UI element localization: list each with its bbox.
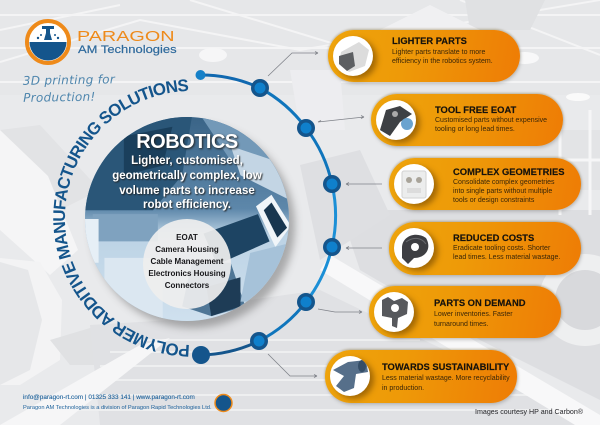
logo: Paragon AM Technologies [25, 19, 177, 65]
inner circle: applications list [143, 219, 231, 309]
icon: blue-grey duct part [330, 356, 370, 396]
logo wordmark: PARAGON [77, 29, 175, 45]
panel: parts on demand: PARTS ON DEMAND [434, 297, 526, 308]
panel: reduced costs [389, 222, 581, 275]
footer contact details: info@paragon-rt.com | 01325 333 141 | www.paragon-rt.com [23, 394, 195, 401]
panel: towards sustainability [325, 350, 517, 403]
panel: complex geometries: tools or design constraints [453, 197, 534, 204]
logo mark [25, 19, 71, 65]
inner circle: applications list: Camera Housing [155, 245, 219, 254]
icon: white manifold part [394, 164, 434, 204]
footer division note: Paragon AM Technologies is a division of Paragon Rapid Technologies Ltd. [23, 405, 212, 411]
central circle: robotics photo [85, 117, 289, 321]
panel: towards sustainability: in production. [382, 385, 424, 392]
curved title: Polymer Additive Manufacturing Solutions: POLYMER ADDITIVE MANUFACTURING SOLUTIONS [53, 79, 189, 357]
panel: reduced costs: REDUCED COSTS [453, 232, 534, 243]
image credit: Images courtesy HP and Carbon® [475, 408, 583, 416]
panel: lighter parts: efficiency in the robotics system. [392, 58, 493, 65]
panel: towards sustainability: Less material wastage. More recyclability [382, 375, 510, 382]
tagline: 3D printing for Production [22, 72, 116, 105]
panel: tool free EOAT: tooling or long lead times. [435, 126, 515, 133]
panel: reduced costs: lead times. Less material wastage. [453, 254, 560, 261]
panel: lighter parts [328, 30, 520, 82]
tagline: 3D printing for Production: 3D printing for [23, 72, 115, 88]
icon: robot gripper part [333, 36, 373, 76]
central description: robot efficiency. [143, 199, 231, 211]
panel: lighter parts: Lighter parts translate to more [392, 49, 485, 56]
panel: tool free EOAT: TOOL FREE EOAT [435, 104, 516, 115]
end node [192, 346, 210, 364]
inner circle: applications list: Cable Management [151, 257, 223, 266]
panel: tool free EOAT: Customised parts without expensive [435, 117, 547, 124]
panel: parts on demand: Lower inventories. Faster [434, 311, 513, 318]
panel: complex geometries: Consolidate complex geometries [453, 179, 555, 186]
panel: complex geometries [389, 158, 581, 210]
heading: Robotics: ROBOTICS [136, 131, 238, 153]
tagline: 3D printing for Production: Production! [23, 90, 96, 105]
panel: towards sustainability: TOWARDS SUSTAINABILITY [382, 361, 509, 372]
inner circle: applications list: EOAT [176, 233, 198, 242]
central description [112, 155, 264, 212]
logo subtitle: AM Technologies [78, 44, 177, 56]
icon: end of arm tool [376, 100, 416, 140]
panel: lighter parts: LIGHTER PARTS [392, 35, 467, 46]
central description: geometrically complex, low [112, 170, 262, 182]
icon: black bellows part [394, 228, 434, 268]
central description: volume parts to increase [119, 185, 255, 197]
inner circle: applications list: Electronics Housing [148, 269, 226, 278]
robot arm photo [85, 117, 289, 321]
panel: complex geometries: COMPLEX GEOMETRIES [453, 166, 564, 177]
start node [196, 70, 206, 80]
panel: parts on demand [369, 286, 561, 338]
panel: parts on demand: turnaround times. [434, 321, 488, 328]
icon: grey bracket part [374, 292, 414, 332]
panel: tool free EOAT [371, 94, 563, 146]
panel: complex geometries: into single parts without multiple [453, 188, 552, 195]
panel: reduced costs: Eradicate tooling costs. Shorter [453, 245, 550, 252]
inner circle: applications list: Connectors [165, 281, 209, 290]
central description: Lighter, customised, [131, 155, 243, 167]
